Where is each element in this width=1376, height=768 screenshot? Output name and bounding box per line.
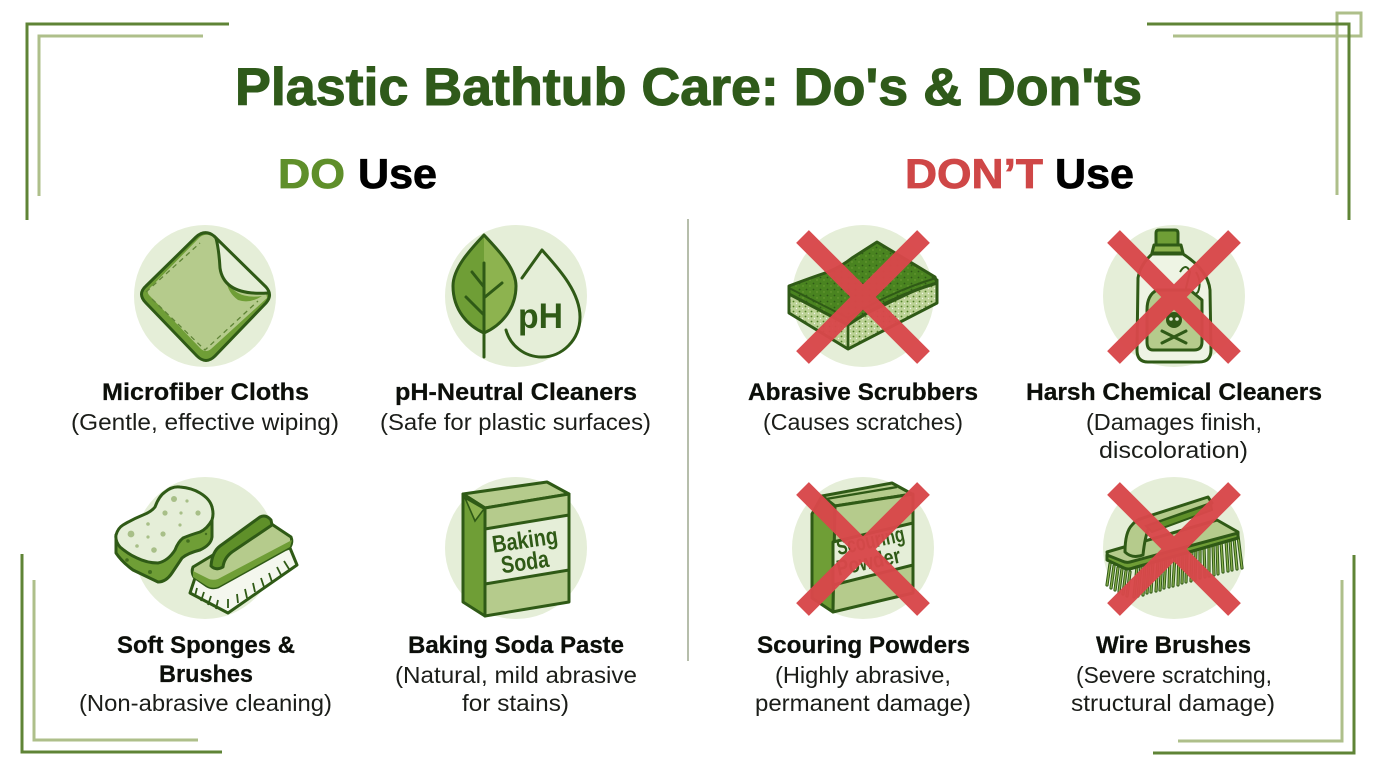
label: Soft Sponges & Brushes: Brushes: [159, 661, 253, 688]
heading: DON'T Use: [905, 150, 1134, 197]
red cross: [802, 236, 924, 358]
label: pH-Neutral Cleaners: pH-Neutral Cleaners: [395, 379, 637, 406]
heading: DO Use: DO: [278, 150, 345, 197]
icon: crossed-out scouring powder box: Powder: [834, 543, 903, 581]
description: [755, 662, 971, 716]
heading: DON'T Use: DON’T: [905, 150, 1043, 197]
panel: baking soda paste: [395, 477, 637, 716]
red cross: [1114, 236, 1234, 358]
description: [1086, 409, 1262, 463]
icon: crossed-out wire brush: [1103, 477, 1245, 619]
icon: baking soda box: Baking: [490, 523, 560, 559]
description: (Causes scratches): [763, 409, 963, 435]
decorative corner: top left: [27, 24, 229, 220]
icon: crossed-out scrubber sponge: [789, 225, 937, 367]
heading: DO Use: [278, 150, 437, 197]
description: structural damage): [1071, 690, 1275, 716]
label: Microfiber Cloths: Microfiber Cloths: [102, 379, 309, 406]
decorative corner: top right: [1147, 13, 1361, 220]
panel: pH-neutral cleaners: [380, 225, 651, 435]
icon: leaf and pH drop: [445, 225, 587, 367]
description: (Severe scratching,: [1076, 662, 1272, 688]
label: Abrasive Scrubbers: Abrasive Scrubbers: [748, 379, 978, 406]
red cross: [802, 488, 924, 610]
heading: DO Use: Use: [358, 150, 437, 197]
center divider: [687, 219, 689, 661]
label: Scouring Powders: Scouring Powders: [757, 632, 970, 659]
label: Soft Sponges & Brushes: Soft Sponges &: [117, 632, 295, 659]
panel: wire brushes: [1071, 477, 1275, 716]
description: (Non-abrasive cleaning): [79, 690, 332, 716]
icon: crossed-out chemical bottle: [1103, 225, 1245, 367]
description: [1071, 662, 1275, 716]
icon: crossed-out scouring powder box: [792, 477, 934, 619]
icon: baking soda box: Soda: [499, 546, 551, 579]
description: (Damages finish,: [1086, 409, 1262, 435]
description: discoloration): [1099, 437, 1248, 463]
description: (Gentle, effective wiping): [71, 409, 339, 435]
panel: microfiber cloths: [71, 225, 339, 435]
icon: crossed-out scouring powder box: Scouring: [834, 521, 907, 560]
panel: abrasive scrubbers: [748, 225, 978, 435]
icon: microfiber cloth: [134, 225, 276, 367]
label: Wire Brushes: Wire Brushes: [1096, 632, 1251, 659]
label: Soft Sponges & Brushes: [117, 632, 295, 688]
icon: leaf and pH drop: pH: [518, 297, 563, 336]
label: Harsh Chemical Cleaners: Harsh Chemical Cleaners: [1026, 379, 1322, 406]
description: permanent damage): [755, 690, 971, 716]
red cross: [1114, 488, 1234, 610]
heading: DON'T Use: Use: [1055, 150, 1134, 197]
description: [395, 662, 637, 716]
panel: scouring powders: [755, 477, 971, 716]
panel: harsh chemical cleaners: [1026, 225, 1322, 463]
description: (Natural, mild abrasive: [395, 662, 637, 688]
label: Baking Soda Paste: Baking Soda Paste: [408, 632, 624, 659]
decorative corner: bottom right: [1153, 555, 1354, 753]
description: (Highly abrasive,: [775, 662, 951, 688]
description: (Safe for plastic surfaces): [380, 409, 651, 435]
title: Plastic Bathtub Care: Do's & Don'ts: [235, 58, 1142, 117]
description: for stains): [462, 690, 569, 716]
icon: baking soda box: [445, 477, 587, 619]
panel: soft sponges and brushes: [79, 477, 332, 716]
icon: sponge and brush: [116, 477, 297, 619]
decorative corner: bottom left: [22, 554, 222, 752]
